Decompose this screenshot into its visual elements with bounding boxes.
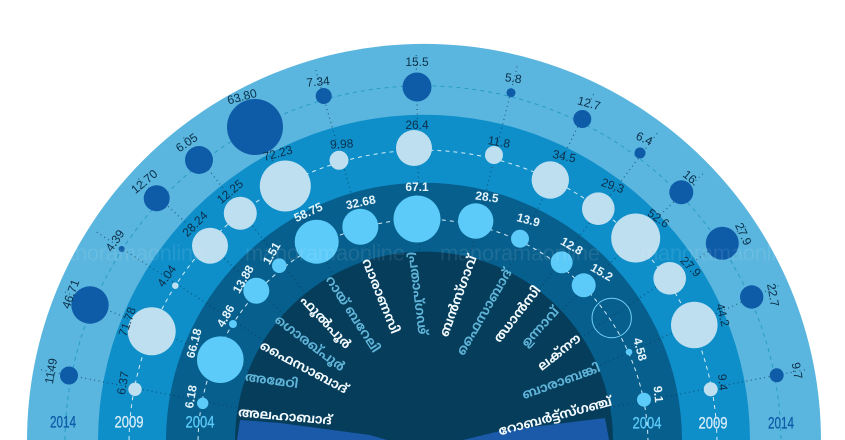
constituency names: ഫൂൽപൂർ bbox=[297, 292, 355, 353]
value labels: 2004: 66.18 bbox=[183, 327, 205, 360]
value labels: 2014: 5.8 bbox=[504, 70, 523, 86]
value labels: 2014: 7.34 bbox=[306, 74, 331, 90]
year labels: 2004 bbox=[632, 414, 662, 432]
year labels: 2004 bbox=[186, 412, 214, 432]
bubbles: 2009 bbox=[128, 130, 718, 396]
value labels: 2009: 44.2 bbox=[713, 302, 733, 328]
constituency names: ഉന്നാവ് bbox=[518, 302, 563, 350]
constituency names: ഫൈസാബാദ് bbox=[258, 338, 352, 397]
constituency names: വാരാണസി bbox=[359, 256, 403, 336]
constituency names: അലഹാബാദ് bbox=[238, 404, 334, 428]
year labels: 2014 bbox=[768, 414, 794, 432]
value labels: 2009: 27.9 bbox=[677, 253, 704, 280]
value labels: 2009 bbox=[114, 118, 733, 396]
value labels: 2014: 12.7 bbox=[576, 94, 602, 113]
value labels: 2009: 9.98 bbox=[330, 136, 354, 152]
value labels: 2014: 22.7 bbox=[764, 282, 782, 308]
value labels: 2004: 4.58 bbox=[630, 336, 650, 363]
value labels: 2014: 1149 bbox=[42, 357, 60, 385]
value labels: 2009: 9.4 bbox=[715, 373, 730, 392]
watermark: manoramaonline bbox=[45, 240, 205, 266]
watermark: manoramaonline bbox=[440, 240, 600, 266]
constituency names: റോബർട്ട്സ്ഗഞ്ച് bbox=[497, 393, 616, 439]
watermark: manoramaonline bbox=[245, 240, 405, 266]
value labels: 2004: 4.86 bbox=[214, 302, 238, 330]
year labels: 2009 bbox=[114, 412, 144, 432]
value labels: 2009: 29.3 bbox=[599, 175, 626, 196]
constituency names: റായ് ബറേലി bbox=[323, 273, 383, 355]
bubbles: 2014 bbox=[60, 72, 784, 384]
constituency names: ഗൊരഖ്പൂർ bbox=[271, 312, 348, 375]
bubbles: 2004 bbox=[197, 196, 651, 409]
value labels: 2014 bbox=[42, 55, 805, 385]
value labels: 2009: 12.25 bbox=[214, 176, 246, 207]
value labels: 2009: 11.8 bbox=[487, 133, 512, 151]
value labels: 2004: 6.18 bbox=[182, 384, 200, 409]
value labels: 2004: 28.5 bbox=[474, 188, 500, 206]
blue wedges at base of inner circle bbox=[237, 418, 609, 440]
value labels: 2009: 6.37 bbox=[114, 370, 132, 396]
value labels: 2014: 46.71 bbox=[59, 277, 83, 311]
value labels: 2009: 26.4 bbox=[405, 118, 429, 132]
dashed year arcs bbox=[65, 86, 781, 440]
value labels: 2004: 13.9 bbox=[515, 210, 542, 230]
constituency names bbox=[238, 251, 616, 439]
constituency names: അമേഠി bbox=[244, 369, 299, 391]
value labels: 2014: 27.9 bbox=[732, 220, 755, 248]
value labels: 2004: 9.1 bbox=[651, 385, 666, 404]
year labels bbox=[50, 412, 794, 432]
watermark bbox=[45, 240, 800, 266]
watermark: manoramaonline bbox=[640, 240, 800, 266]
value labels: 2004: 32.68 bbox=[345, 192, 377, 212]
value labels: 2014: 12.70 bbox=[128, 166, 161, 197]
constituency names: ബൻസ്ഗാവ് bbox=[436, 251, 480, 339]
constituency names: പ്രതാപ്ഗഢ് bbox=[405, 251, 431, 337]
value labels: 2014: 6.05 bbox=[173, 130, 201, 155]
dotted radial spokes bbox=[38, 52, 808, 408]
value labels: 2004: 67.1 bbox=[405, 180, 429, 194]
value labels: 2004: 15.2 bbox=[588, 260, 616, 284]
year labels: 2009 bbox=[698, 414, 728, 432]
value labels: 2014: 63.80 bbox=[226, 86, 259, 107]
constituency names: ലക്നൗ bbox=[534, 330, 584, 374]
value labels: 2009: 72.23 bbox=[261, 143, 294, 164]
value labels: 2009: 34.5 bbox=[551, 147, 577, 166]
value labels: 2004 bbox=[182, 180, 666, 409]
value labels: 2009: 71.78 bbox=[116, 305, 139, 338]
value labels: 2004: 1.51 bbox=[260, 239, 284, 267]
year labels: 2014 bbox=[50, 412, 76, 432]
value labels: 2009: 52.6 bbox=[645, 206, 672, 231]
value labels: 2009: 4.04 bbox=[154, 262, 179, 290]
value labels: 2004: 13.88 bbox=[230, 263, 257, 296]
value labels: 2014: 4.39 bbox=[103, 227, 128, 254]
value labels: 2014: 16. bbox=[680, 167, 702, 189]
value labels: 2014: 15.5 bbox=[405, 55, 429, 69]
constituency names: ഫൈസാബാദ് bbox=[453, 264, 516, 358]
value labels: 2014: 6.4 bbox=[634, 129, 655, 149]
value labels: 2004: 58.75 bbox=[292, 199, 325, 225]
value labels: 2004: 12.8 bbox=[558, 234, 586, 258]
value labels: 2014: 9.7 bbox=[789, 361, 805, 380]
constituency names: ബാരാബങ്കി bbox=[520, 360, 602, 402]
constituency names: ഝാൻസി bbox=[490, 283, 544, 345]
value labels: 2009: 28.24 bbox=[179, 208, 211, 240]
